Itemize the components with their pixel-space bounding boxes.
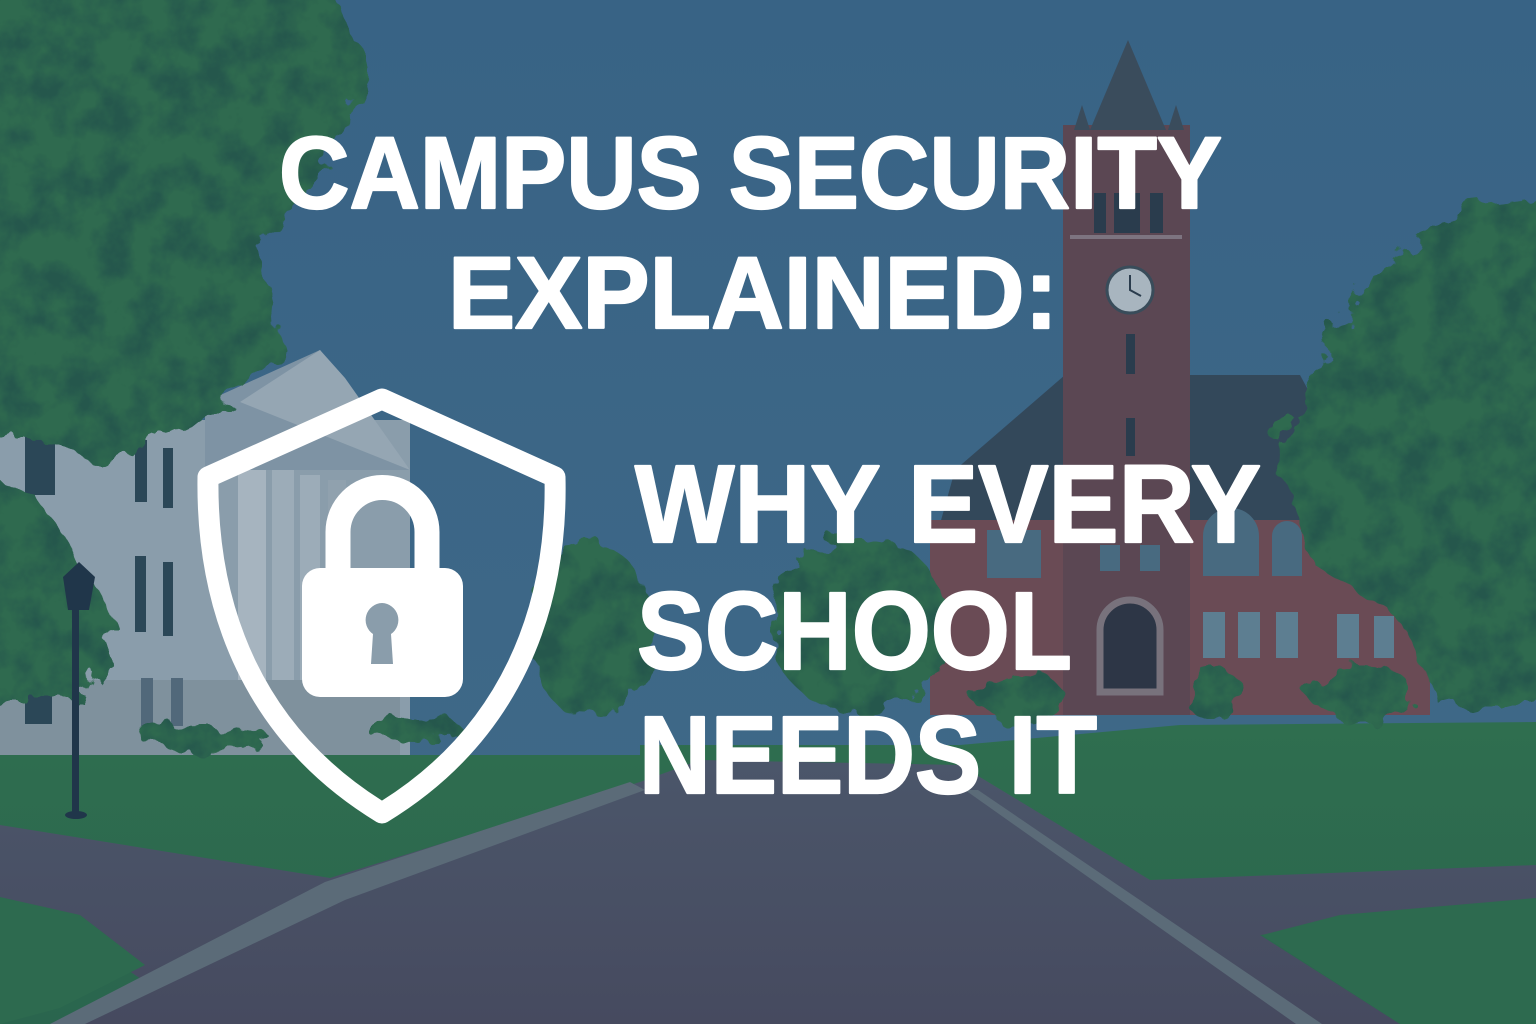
icon: shield with padlock <box>208 399 555 813</box>
clock <box>1107 267 1153 313</box>
title: campus security explained: EXPLAINED: <box>448 236 1058 350</box>
subtitle: why every school needs it: SCHOOL <box>637 570 1072 693</box>
shield outline <box>208 399 555 813</box>
title: campus security explained: CAMPUS SECURITY <box>279 116 1222 230</box>
subtitle: why every school needs it: WHY EVERY <box>635 443 1261 566</box>
paths and road <box>0 760 1536 1024</box>
trees <box>0 0 1536 750</box>
brick hall and clock tower <box>930 40 1430 715</box>
subtitle: why every school needs it: NEEDS IT <box>639 694 1097 817</box>
lawn base <box>0 722 1536 1024</box>
padlock shackle <box>338 488 427 572</box>
title: campus security explained <box>279 116 1222 350</box>
subtitle: why every school needs it <box>635 443 1261 817</box>
left building <box>0 350 410 755</box>
padlock body with keyhole <box>302 568 463 697</box>
lamp post <box>63 562 95 819</box>
